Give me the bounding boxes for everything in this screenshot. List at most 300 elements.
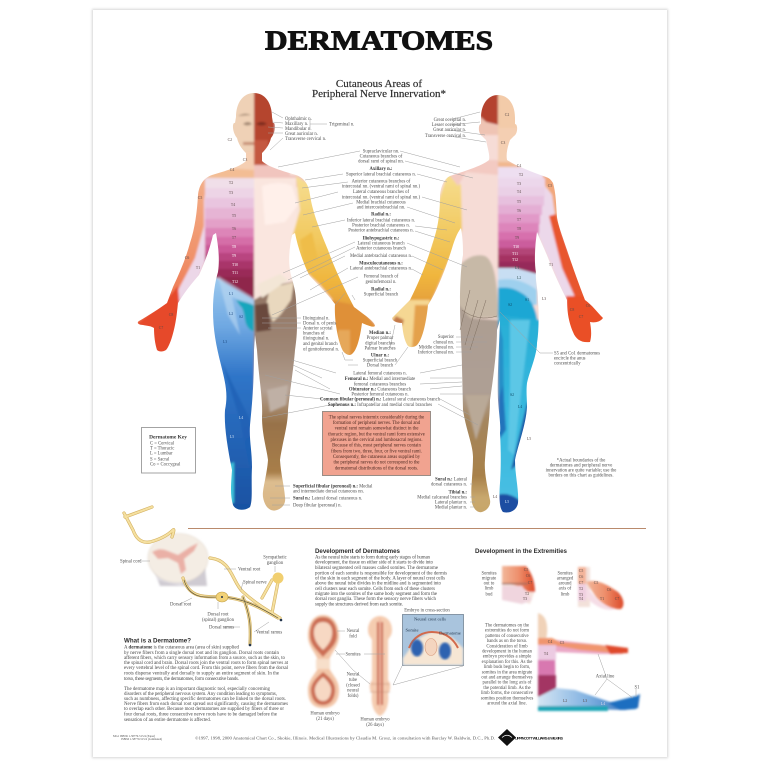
back figure: segment labels: T7 [517,218,521,222]
publisher logo: LIPPINCOTT WILLIAMS & WILKINS [515,736,563,740]
footnote: innervation are quite variable; use the [546,468,616,474]
footer code [113,734,162,741]
spinal cord labels: Dorsal root [207,612,229,618]
back figure: segment labels: L4 [493,495,497,499]
front figure: segment labels: C8 [169,313,173,317]
copyright line: ©1997, 1998, 2000 Anatomical Chart Co., Skokie, Illinois. Medical Illustrations by Claudia M. Grosz, in consultation with Barclay W. Baldwin, D.C., Ph.D. [195,736,495,742]
groin nerves [303,316,339,352]
what is a dermatome text: disorders of the peripheral nervous system. Any condition leading to symptoms, [124,692,277,697]
extremities text: limb buds begin to form, [484,665,530,670]
front figure: segment labels: T4 [231,203,235,207]
embryo labels: Embryo in cross-section [404,608,450,614]
upper column: Anterior cutaneous branch [356,246,407,252]
limb bud stage one labels: T3 [523,597,527,601]
hand nerves: Median n.: [369,331,391,336]
front figure: segment labels: T11 [232,271,238,275]
axial line labels [544,640,640,706]
back figure: segment labels: C7 [579,315,583,319]
extremities text: around the axial line. [487,702,527,706]
anus note [554,352,600,366]
embryo cross-section inset: Neural crest cells [414,616,446,622]
axial line labels: C4 [548,640,552,644]
development of dermatomes text: above the neural tube divides in the midline and is segmented into [315,582,442,586]
hand nerves: Proper palmar [367,336,394,341]
upper column: Inferior lateral brachial cutaneous n. [347,218,415,224]
anus note: S5 and Co1 dermatomes [554,352,600,356]
foot nerves back: Lateral plantar n. [435,500,467,506]
head nerves front: Mandibular n. [285,127,312,132]
limb bud labels: out to [484,582,495,586]
subtitle: Cutaneous Areas of [336,78,422,90]
upper column: Lateral antebrachial cutaneous n. [350,266,412,272]
extremities text: parallel to the long axis of [482,681,532,686]
front figure: segment labels: T1 [196,266,200,270]
development of dermatomes text: As the neural tube starts to form during early stages of human [315,556,431,560]
anus note: concentrically [554,362,581,366]
what is a dermatome text: to overlap each other. Because most dermatomes are supplied by fibers of three or [124,707,284,712]
what is a dermatome text: roots disperse ventrally and dorsally to supply an entire segment of skin. In the [124,672,279,676]
back figure: segment labels: S2 [508,303,512,307]
limb bud labels [481,572,574,598]
dermatome key: C = Cervical [150,442,175,446]
axial line labels: L2 [563,699,567,703]
what is a dermatome text: Nerve fibers from each dorsal root spread out significantly, causing the dermatomes [124,702,288,707]
back figure: segment labels: T3 [517,182,521,186]
embryo labels: (26 days) [366,723,384,728]
cluneal nerves: Middle cluneal nn. [419,346,454,350]
back figure: segment labels: C6 [586,304,590,308]
hand nerves [363,331,398,368]
extremities text: the potential limb. As the [483,686,531,691]
leg nerves: Saphenous n.: Infrapatellar and medial crural branches [328,403,432,408]
cluneal nerves: Inferior cluneal nn. [418,350,454,356]
foot nerves back: dorsal cutaneous n. [431,482,467,488]
extremities text: patterns of consecutive [485,634,529,639]
front figure: segment labels: T3 [229,191,233,195]
back figure: segment labels: T6 [517,209,521,213]
head nerves front: Transverse cervical n. [285,137,326,142]
what is a dermatome text: torso, these segments, the dermatomes, form consecutive bands. [124,677,239,682]
spinal cord labels: Spinal nerve [243,580,267,586]
salmon callout box: the peripheral nerves do not correspond to the [333,461,420,466]
extremities text: bands as on the torso. [487,639,527,644]
hand nerves: Dorsal branch [367,364,394,368]
axial line labels: T4 [544,652,548,656]
upper column: Medial brachial cutaneous [356,200,406,206]
extremities text: extremities do not form [485,629,529,634]
upper column [342,150,420,298]
groin nerves: Ilioinguinal n. [303,316,330,322]
half figure with outstretched limbs [538,613,640,711]
embryo labels: tube [349,678,357,683]
limb bud labels: arranged [557,576,574,582]
dermatome key: S = Sacral [150,458,170,462]
what is a dermatome text [124,646,289,723]
groin nerves: ilioinguinal n. [303,336,329,342]
upper column: Superior lateral brachial cutaneous n. [346,172,416,178]
axial line labels: S1 [635,686,640,690]
what is a dermatome text: four dorsal roots, three consecutive nerve roots have to be damaged before the [124,712,277,718]
salmon callout box: thoracic region, but the ventral rami form extensive [328,432,425,437]
limb bud stage one labels: C5 [524,568,528,572]
limb bud labels: migrate [482,576,496,582]
footnote: *Actual boundaries of the [557,458,605,464]
salmon callout box: The spinal nerves intermix considerably during the [329,416,424,420]
front figure: segment labels: T12 [232,280,238,284]
groin nerves: and genital branch [303,342,338,347]
foot nerves front: Superficial fibular (peroneal) n.: Medial [293,484,373,490]
extremities text: embryo provides a simple [483,655,531,660]
footnote: borders on this chart as guidelines. [548,474,614,478]
extremities text: Consideration of limb [486,644,528,649]
upper column: Radial n.: [371,288,391,292]
limb bud labels: limb [485,586,494,592]
hand nerves: Palmar branches [364,346,396,352]
hand nerves: Superficial branch [363,358,398,364]
head nerves back: Great auricular n. [433,128,466,133]
anus note: encircle the anus [554,356,586,362]
limb bud stage two labels: C7 [579,581,583,585]
footnote: dermatomes and peripheral nerve [550,464,612,468]
embryo at 21 days [308,615,339,708]
footer code: ISBN# 1-58779-515-9 (Laminated) [121,737,162,741]
cross section of spinal cord [148,534,208,582]
embryo cross-section inset: Dermatome [439,630,461,636]
limb bud stage two labels: T2 [579,587,583,591]
limb bud stage two labels: T1 [600,597,604,601]
dermatome key: Dermatome Key [149,434,187,440]
development of dermatomes text: supply the structures derived from each somite. [315,602,403,608]
front figure: segment labels: T10 [232,263,238,267]
spinal cord labels: ganglion [267,561,284,566]
title: DERMATOMES [265,26,493,56]
dermatome key [142,428,196,473]
groin nerves: of genitofemoral n. [303,348,339,352]
upper column: intercostal nn. (ventral rami of spinal nn.) [342,184,420,190]
head nerves front: Maxillary n. [285,122,308,127]
development of dermatomes text: bilateral segmented cell masses called somites. The dermatome [315,566,438,571]
back figure: segment labels: C2 [505,113,509,117]
extremities text: limb forms, the consecutive [481,691,533,696]
embryo labels: Neural [347,629,360,634]
leg nerves: femoral cutaneous branches [354,382,406,388]
extremities text: somites position themselves [481,696,533,701]
spinal cord labels: Ventral ramus [256,630,282,636]
what is a dermatome text: The dermatome map is an important diagnostic tool, especially concerning [124,687,271,692]
back figure: segment labels: T9 [515,236,519,240]
front figure: segment labels [159,138,247,439]
publisher logo [498,729,563,746]
footnote [546,458,616,478]
salmon callout box [322,412,430,476]
upper column: Axillary n.: [370,167,393,172]
groin nerves: Anterior scrotal [303,326,333,332]
head nerves back: Transverse cervical n. [425,134,466,139]
front figure: segment labels: C6 [185,256,189,260]
axial line labels: L4 [601,702,605,706]
front figure: segment labels: L5 [230,435,234,439]
front figure: segment labels: C3 [243,158,247,162]
what is a dermatome text: the spinal cord and brain. Dorsal roots join the ventral roots to form spinal nerves at [124,661,289,666]
back figure [385,90,610,520]
dorsal root ganglion [216,592,228,602]
central nerve labels [285,117,466,408]
foot nerves back: Tibial n.: [449,490,467,496]
hand nerves: digital branches [365,342,395,346]
embryo labels: Human embryo [360,718,390,722]
dermatome key: Co = Coccygeal [150,462,181,468]
sympathetic ganglion [272,572,284,584]
spinal cord labels: Dorsal root [170,602,192,608]
head nerves front [285,117,354,142]
spinal cord labels: Spinal cord [120,560,142,564]
upper column: and intercostobrachial nn. [357,206,405,210]
extremities text: development in the human [482,650,533,654]
upper column: genitofemoral n. [366,280,396,285]
development of dermatomes text: migrate into the somites of the same body segment and form the [315,592,437,597]
salmon callout box: Consequently, the cutaneous areas supplied by [333,455,421,460]
upper column: Posterior brachial cutaneous n. [352,224,410,228]
leg nerves: Femoral n.: Medial and intermediate [345,377,415,382]
embryo labels: fold [349,634,357,640]
axial line labels: Axial line [596,674,614,680]
back figure: segment labels: T8 [517,227,521,231]
back figure: segment labels: C5 [548,184,552,188]
development of dermatomes text [315,556,447,608]
front figure: segment labels: T5 [232,214,236,218]
leg nerves: Lateral femoral cutaneous n. [353,372,407,376]
back figure: segment labels: S2 [510,393,514,397]
development of dermatomes text: development, the tissue on either side of it starts to divide into [315,560,434,566]
development of dermatomes heading: Development of Dermatomes [315,548,401,555]
head nerves back: Lesser occipital n. [432,123,466,128]
vertebral column stub [150,560,207,586]
poster sheet [92,9,668,758]
upper column: Posterior antebrachial cutaneous n. [348,228,414,234]
leg nerves: Obturator n.: Cutaneous branch [349,388,412,392]
foot nerves back [417,478,468,510]
limb bud stage two labels: C7 [615,597,619,601]
what is a dermatome text: such as numbness, affecting specific dermatomes can be linked to the dorsal roots. [124,697,286,702]
salmon callout box: ventral rami remain somewhat distinct in the [335,427,418,432]
groin nerves: branches of [303,332,325,336]
limb bud labels: around [558,582,572,586]
cluneal nerves: Superior [438,335,454,340]
back figure: segment labels: L4 [518,405,522,409]
front figure: segment labels: C4 [230,168,234,172]
upper column: Lateral cutaneous branches of [353,190,409,195]
subtitle [312,78,446,100]
front figure: segment labels: L4 [239,416,243,420]
limb bud labels: limb [561,592,570,598]
front figure: segment labels: T8 [232,245,236,249]
spinal cord labels: Ventral root [238,568,261,572]
spinal cord illustration [120,507,287,646]
upper column: dorsal rami of spinal nn. [358,160,404,164]
cluneal nerves: cluneal nn. [433,340,454,346]
back figure: segment labels: T5 [517,200,521,204]
back figure: segment labels: L1 [515,266,519,270]
upper column: Musculocutaneous n.: [359,262,403,266]
upper column: intercostal nn. (ventral rami of spinal nn.) [342,196,420,200]
front figure: segment labels: C2 [228,138,232,142]
embryo labels: neural [347,688,360,694]
extremities text [481,624,533,706]
limb bud stage two labels [579,569,619,601]
front figure: segment labels: C5 [198,196,202,200]
upper column: Radial n.: [371,212,391,218]
limb bud stage one labels [523,568,532,601]
upper column: Cutaneous branches of [360,154,403,160]
development in the extremities heading: Development in the Extremities [475,548,568,555]
head nerves front: Ophthalmic n. [285,117,312,122]
front figure: segment labels: C7 [159,326,163,330]
back figure: segment labels: T1 [549,263,553,267]
salmon callout box: dermatomal distributions of the dorsal roots. [335,466,418,471]
salmon callout box: fibers from two, three, four, or five ventral rami. [331,449,422,454]
limb bud stage two labels: T4 [579,597,583,601]
limb bud stage two labels: C6 [607,588,611,592]
groin nerves: Dorsal n. of penis [303,322,337,326]
salmon callout box: formation of peripheral nerves. The dorsal and [333,421,421,426]
embryo cross-section inset [402,614,464,666]
upper column: Medial antebrachial cutaneous n. [350,254,412,259]
leg nerves [320,372,441,408]
front figure: segment labels: T6 [232,227,236,231]
foot nerves front: Deep fibular (peroneal) n. [293,504,342,508]
embryo labels: (21 days) [316,717,334,722]
front figure [130,85,380,525]
limb bud labels: bud [485,592,493,598]
upper column: Lateral cutaneous branch [357,242,405,246]
embryo labels: Somites [345,652,361,658]
dermatome key: T = Thoracic [150,446,174,452]
what is a dermatome text: by nerve fibers from a single dorsal root and its ganglion. Dorsal roots contain [124,651,280,656]
embryo at 26 days [368,616,392,716]
what is a dermatome text: sensation of an entire dermatome is affected. [124,718,211,723]
head nerves front: Great auricular n. [285,132,318,137]
development of dermatomes text: portion of each somite is responsible for development of the dermis [315,572,447,576]
back figure: coloured body regions [385,90,610,520]
development of dermatomes text: dorsal root ganglia. These form the sensory nerve fibers which [315,597,437,602]
embryo labels: Human embryo [310,712,340,716]
foot nerves back: Medial calcaneal branches [417,496,467,500]
extremities text: The dermatomes on the [485,624,529,628]
limb bud stage two labels: C6 [579,575,583,579]
spinal cord labels: (spinal) ganglion [202,618,235,623]
subtitle: Peripheral Nerve Innervation* [312,88,446,100]
back figure: segment labels: C4 [517,164,521,168]
what is a dermatome text: every vertebral level of the spinal cord. From this point, nerve fibers from the dorsal [124,666,289,671]
back figure: segment labels: L5 [505,500,509,504]
extremities text: out and arrange themselves [481,676,533,680]
embryo labels [310,608,450,728]
what is a dermatome text: A dermatome is the cutaneous area (area of skin) supplied [124,646,240,650]
salmon callout box: Because of this, most peripheral nerves contain [332,444,421,449]
limb bud stage one labels: C6 [526,574,530,578]
front figure: segment labels: S2 [239,315,243,319]
upper column: Anterior cutaneous branches of [352,180,411,184]
limb bud stage one labels: T2 [525,592,529,596]
spinal cord labels [120,556,287,636]
head nerves back [425,118,466,139]
embryo labels: folds) [348,694,359,699]
limb bud stage two labels: C5 [579,569,583,573]
back figure: segment labels: L5 [527,437,531,441]
upper column: Superficial branch [364,292,399,298]
upper column: Supraclavicular nn. [363,150,399,154]
footer code: MG1 ISBN# 1-58779-515-9 (Paper) [113,734,155,738]
what is a dermatome text: afferent fibers, which carry sensory information from a source, such as the skin, to [124,656,286,661]
upper column: Femoral branch of [364,274,399,280]
front figure: segment labels: T7 [232,236,236,240]
head nerves front: Trigeminal n. [329,122,354,128]
back figure: internal fold lines [460,290,497,350]
back figure: segment labels: C3 [501,141,505,145]
embryo labels: Neural [347,672,360,678]
front figure: segment labels: L2 [229,312,233,316]
development of dermatomes text: of the skin in each segment of the body. A layer of neural crest cells [315,576,445,582]
axial line leaders [595,654,636,698]
cluneal nerves [418,335,454,356]
embryo cross-section inset: Somite [405,628,419,632]
back figure: segment labels: T11 [512,252,518,256]
inset leader lines [335,631,463,685]
head nerves back: Great occipital n. [434,118,466,123]
what is a dermatome heading: What is a Dermatome? [124,638,191,644]
dermatome key: L = Lumbar [150,452,173,456]
back figure: segment labels: L3 [542,297,546,301]
limb bud labels: axis of [559,586,572,592]
foot nerves front [293,484,373,508]
front figure: segment labels: L3 [223,340,227,344]
nerve end caps [221,596,282,646]
upper column: Iliohypogastric n.: [363,236,400,242]
limb bud labels: Somites [557,572,573,576]
leg nerves: Common fibular (peroneal) n.: Lateral sural cutaneous branch [320,398,441,402]
leader lines to labels [262,112,553,507]
axial line labels: C5 [560,641,564,645]
back figure: segment labels: C8 [570,308,574,312]
limb bud stage two labels: T3 [579,593,583,597]
front figure: segment labels: T2 [229,181,233,185]
limb bud stage two [578,567,623,610]
limb bud stage two labels: C5 [594,581,598,585]
back figure: segment labels: T12 [512,258,518,262]
foot nerves front: and intermediate dorsal cutaneous nn. [293,490,364,494]
nerve roots [124,507,280,644]
back figure: segment labels: L2 [517,276,521,280]
back figure: segment labels: T2 [519,173,523,177]
back figure: segment labels [493,113,590,504]
salmon callout box: plexuses in the cervical and lumbosacral regions. [330,438,423,443]
foot nerves back: Medial plantar n. [435,506,467,510]
foot nerves front: Sural n.: Lateral dorsal cutaneous n. [293,496,362,502]
front figure: segment labels: T9 [232,254,236,258]
back figure: segment labels: S1 [525,298,529,302]
axial line labels: L3 [583,699,587,703]
spinal cord labels: Sympathetic [263,556,287,560]
section divider [188,528,646,530]
leg nerves: Posterior femoral cutaneous n. [351,392,409,398]
extremities text: explanation for this. As the [482,660,532,665]
back figure: segment labels: T4 [517,190,521,194]
development of dermatomes text: cell clusters near each somite. Cells from each of these clusters [315,587,435,592]
limb bud labels: Somites [481,572,497,576]
hand nerves: Ulnar n.: [371,354,390,358]
limb bud stage one labels: C7 [528,581,532,585]
front figure: coloured body regions [130,85,380,525]
